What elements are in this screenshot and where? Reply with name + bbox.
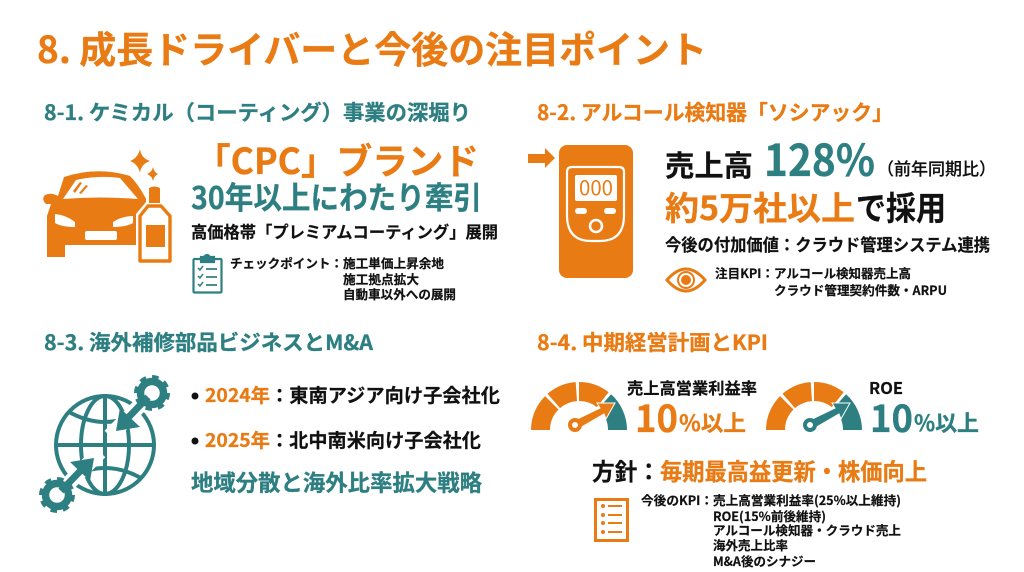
icon: globe with gears and arrows (41, 377, 168, 511)
value: ROE: 10 (870, 389, 913, 443)
2024 bullet: 2024年 (205, 381, 270, 408)
panel: 8-4 mid-term plan and KPI (531, 327, 979, 570)
icon: clipboard checklist (194, 255, 222, 292)
checkpoints text: チェックポイント： (230, 253, 343, 272)
title: 8. 成長ドライバーと今後の注目ポイント (37, 20, 707, 74)
KPI text: アルコール検知器売上高 (774, 263, 911, 282)
panel: 8-2 alcohol checker (528, 97, 996, 299)
premium coating text: 高価格帯「プレミアムコーティング」展開 (191, 219, 498, 243)
value: operating margin: 10 (635, 389, 678, 443)
value: operating margin: %以上 (679, 406, 746, 438)
gauge: ROE (766, 382, 862, 430)
future KPI text: 今後のKPI： (641, 490, 713, 509)
value: ROE: %以上 (914, 406, 979, 438)
2025 bullet: ：北中南米向け子会社化 (270, 426, 481, 453)
checkpoints text: 施工拠点拡大 (343, 269, 419, 288)
future KPI text: M&A後のシナジー (713, 551, 816, 570)
policy line: 毎期最高益更新・株価向上 (660, 453, 927, 487)
panel: 8-3 overseas parts and M&A (41, 327, 500, 511)
adoption headline: で採用 (856, 182, 946, 230)
icon: eye (667, 269, 705, 291)
value: ROE (870, 389, 979, 443)
128% value: 128% (764, 125, 875, 189)
icon: alcohol detector: 000 (579, 172, 613, 201)
KPI text: 注目KPI： (715, 263, 774, 282)
policy line: 方針： (592, 453, 660, 487)
adoption headline: 約5万社以上 (665, 182, 855, 230)
value: operating margin (635, 389, 746, 443)
label: operating margin: 売上高営業利益率 (627, 375, 757, 399)
icon: list document (596, 500, 628, 540)
added value text: 今後の付加価値：クラウド管理システム連携 (665, 231, 990, 256)
heading: 8-4: 8-4. 中期経営計画とKPI (537, 327, 768, 357)
KPI text (715, 263, 947, 299)
year-on-year note: （前年同期比） (877, 155, 996, 180)
KPI text: クラウド管理契約件数・ARPU (774, 280, 947, 299)
checkpoints text: 施工単価上昇余地 (343, 253, 444, 272)
heading: 8-2: 8-2. アルコール検知器「ソシアック」 (537, 97, 893, 127)
future KPI text: アルコール検知器・クラウド売上 (713, 520, 901, 539)
icon: arrow (528, 148, 555, 168)
future KPI text: 海外売上比率 (713, 535, 788, 554)
sales label: 売上高 (665, 143, 753, 185)
2024 bullet: ：東南アジア向け子会社化 (270, 381, 500, 408)
CPC brand headline: 「CPC」ブランド (195, 133, 479, 185)
future KPI text: 売上高営業利益率(25%以上維持) (713, 490, 901, 509)
gauge: operating margin (531, 382, 627, 430)
panel: 8-1 chemical coating (43, 97, 498, 303)
adoption headline (665, 182, 946, 230)
2025 bullet: 2025年 (205, 426, 270, 453)
icon: alcohol detector (559, 145, 633, 278)
future KPI text: ROE(15%前後維持) (713, 506, 826, 525)
30 years headline: 30年以上にわたり牽引 (191, 173, 482, 218)
heading: 8-1: 8-1. ケミカル（コーティング）事業の深堀り (44, 97, 471, 127)
label: ROE: ROE (869, 375, 903, 399)
strategy line: 地域分散と海外比率拡大戦略 (191, 466, 482, 498)
heading: 8-3: 8-3. 海外補修部品ビジネスとM&A (44, 327, 374, 357)
checkpoints text: 自動車以外への展開 (343, 284, 456, 303)
icon: car with coating bottle (43, 149, 177, 268)
checkpoints text (230, 253, 456, 303)
future KPI text (641, 490, 901, 570)
